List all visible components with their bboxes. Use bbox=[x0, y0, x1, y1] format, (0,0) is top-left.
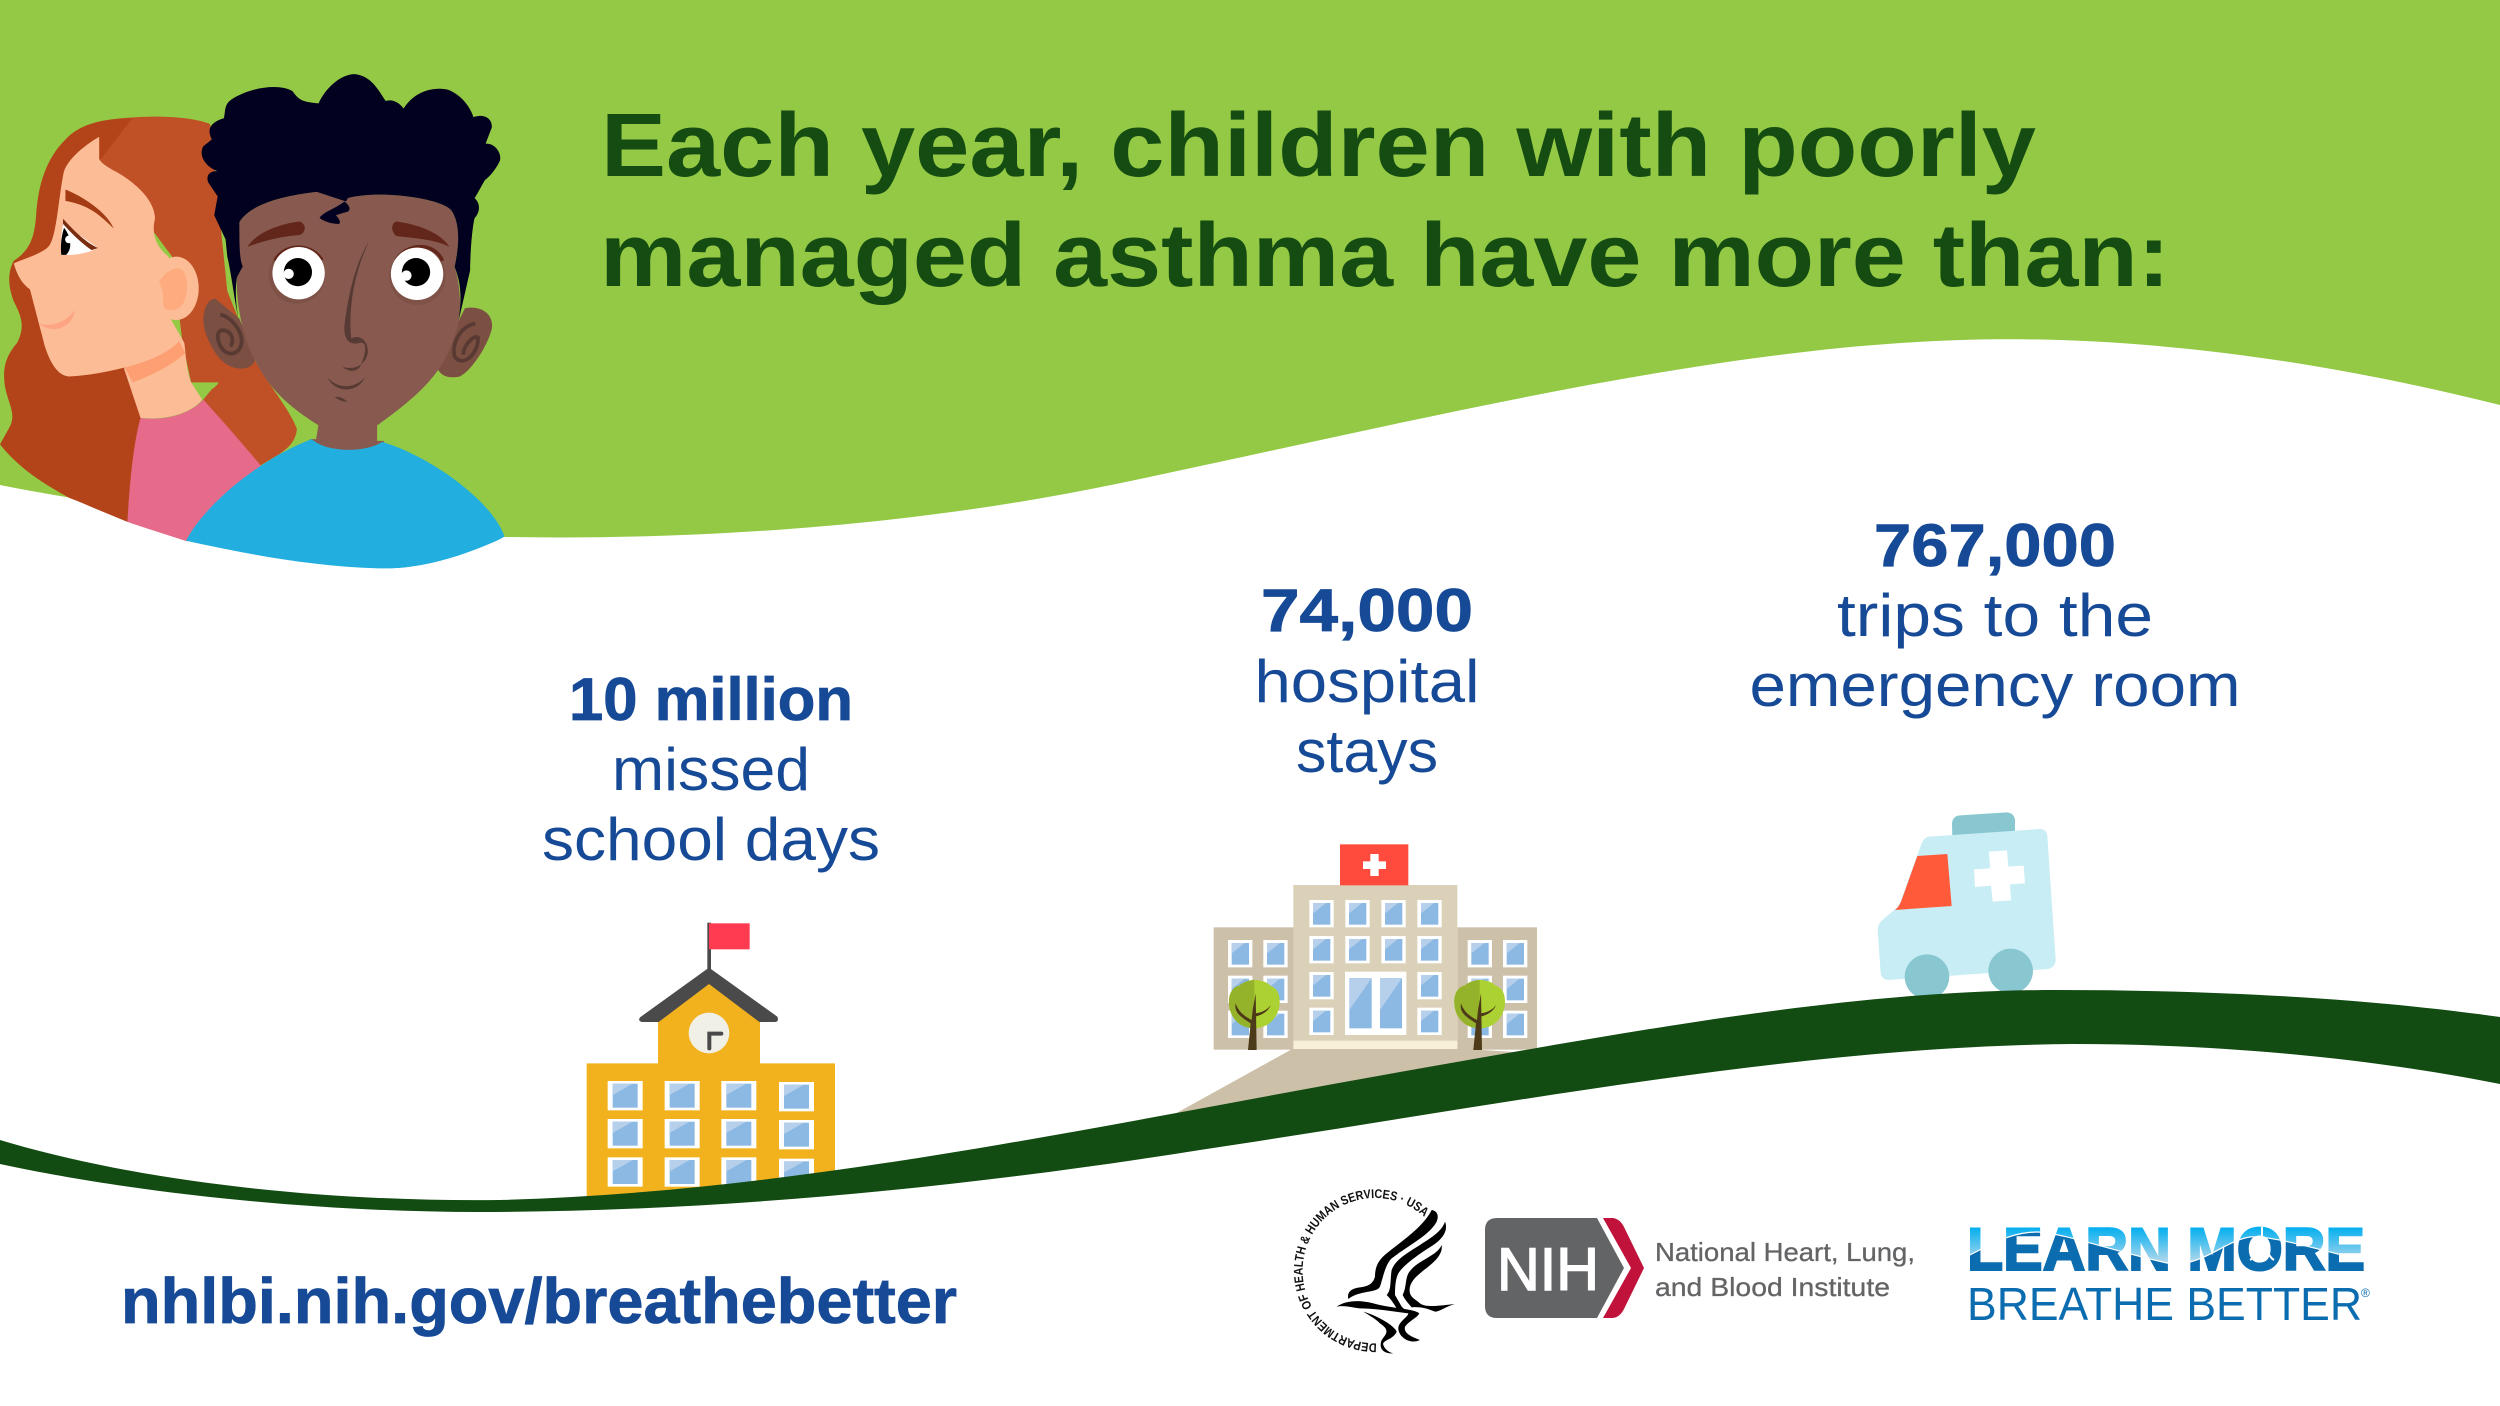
stat: hospital stays: hospital bbox=[1254, 648, 1480, 715]
stat: emergency room trips: 767,000 bbox=[1874, 512, 2116, 579]
stat: missed school days: school days bbox=[542, 806, 880, 873]
logo: Learn More Breathe Better: BREATHE BETTER bbox=[1967, 1278, 2362, 1330]
logo: NIH bbox=[1485, 1218, 1915, 1318]
logo: Learn More Breathe Better: ® bbox=[2361, 1286, 2370, 1300]
tree right bbox=[1454, 980, 1505, 1050]
logo: NIH: and Blood Institute bbox=[1655, 1272, 1890, 1302]
green header wave bbox=[0, 0, 2500, 537]
illustration: two children bbox=[0, 74, 505, 568]
stat: hospital stays bbox=[1254, 577, 1480, 785]
stat: hospital stays: stays bbox=[1296, 718, 1438, 785]
boy bbox=[186, 74, 505, 568]
logo: Learn More Breathe Better: LEARN MORE bbox=[1967, 1216, 2365, 1283]
title bbox=[600, 96, 2170, 306]
girl bbox=[0, 117, 297, 542]
stat: emergency room trips: emergency room bbox=[1750, 652, 2240, 719]
stat: missed school days bbox=[542, 666, 880, 873]
title: managed asthma have more than: bbox=[600, 206, 2170, 306]
logo: HHS seal: DEPARTMENT OF HEALTH & HUMAN SERVICES · USA bbox=[1294, 1189, 1428, 1352]
title: Each year, children with poorly bbox=[601, 96, 2036, 196]
logo: NIH: NIH bbox=[1497, 1236, 1599, 1303]
stat: emergency room trips: trips to the bbox=[1837, 582, 2153, 649]
stat: missed school days: 10 million bbox=[569, 666, 853, 733]
stat: emergency room trips bbox=[1750, 512, 2240, 719]
tree left bbox=[1229, 980, 1280, 1050]
icon: ambulance bbox=[1878, 812, 2056, 999]
logo: NIH: National Heart, Lung, bbox=[1655, 1237, 1915, 1267]
dark green hill wave bbox=[0, 990, 2500, 1212]
website url: nhlbi.nih.gov/breathebetter bbox=[121, 1265, 957, 1337]
stat: hospital stays: 74,000 bbox=[1261, 577, 1473, 644]
logo: Learn More Breathe Better bbox=[1967, 1216, 2370, 1330]
icon: hospital bbox=[1170, 844, 1537, 1117]
icon: school bbox=[587, 923, 835, 1197]
stat: missed school days: missed bbox=[612, 736, 810, 803]
